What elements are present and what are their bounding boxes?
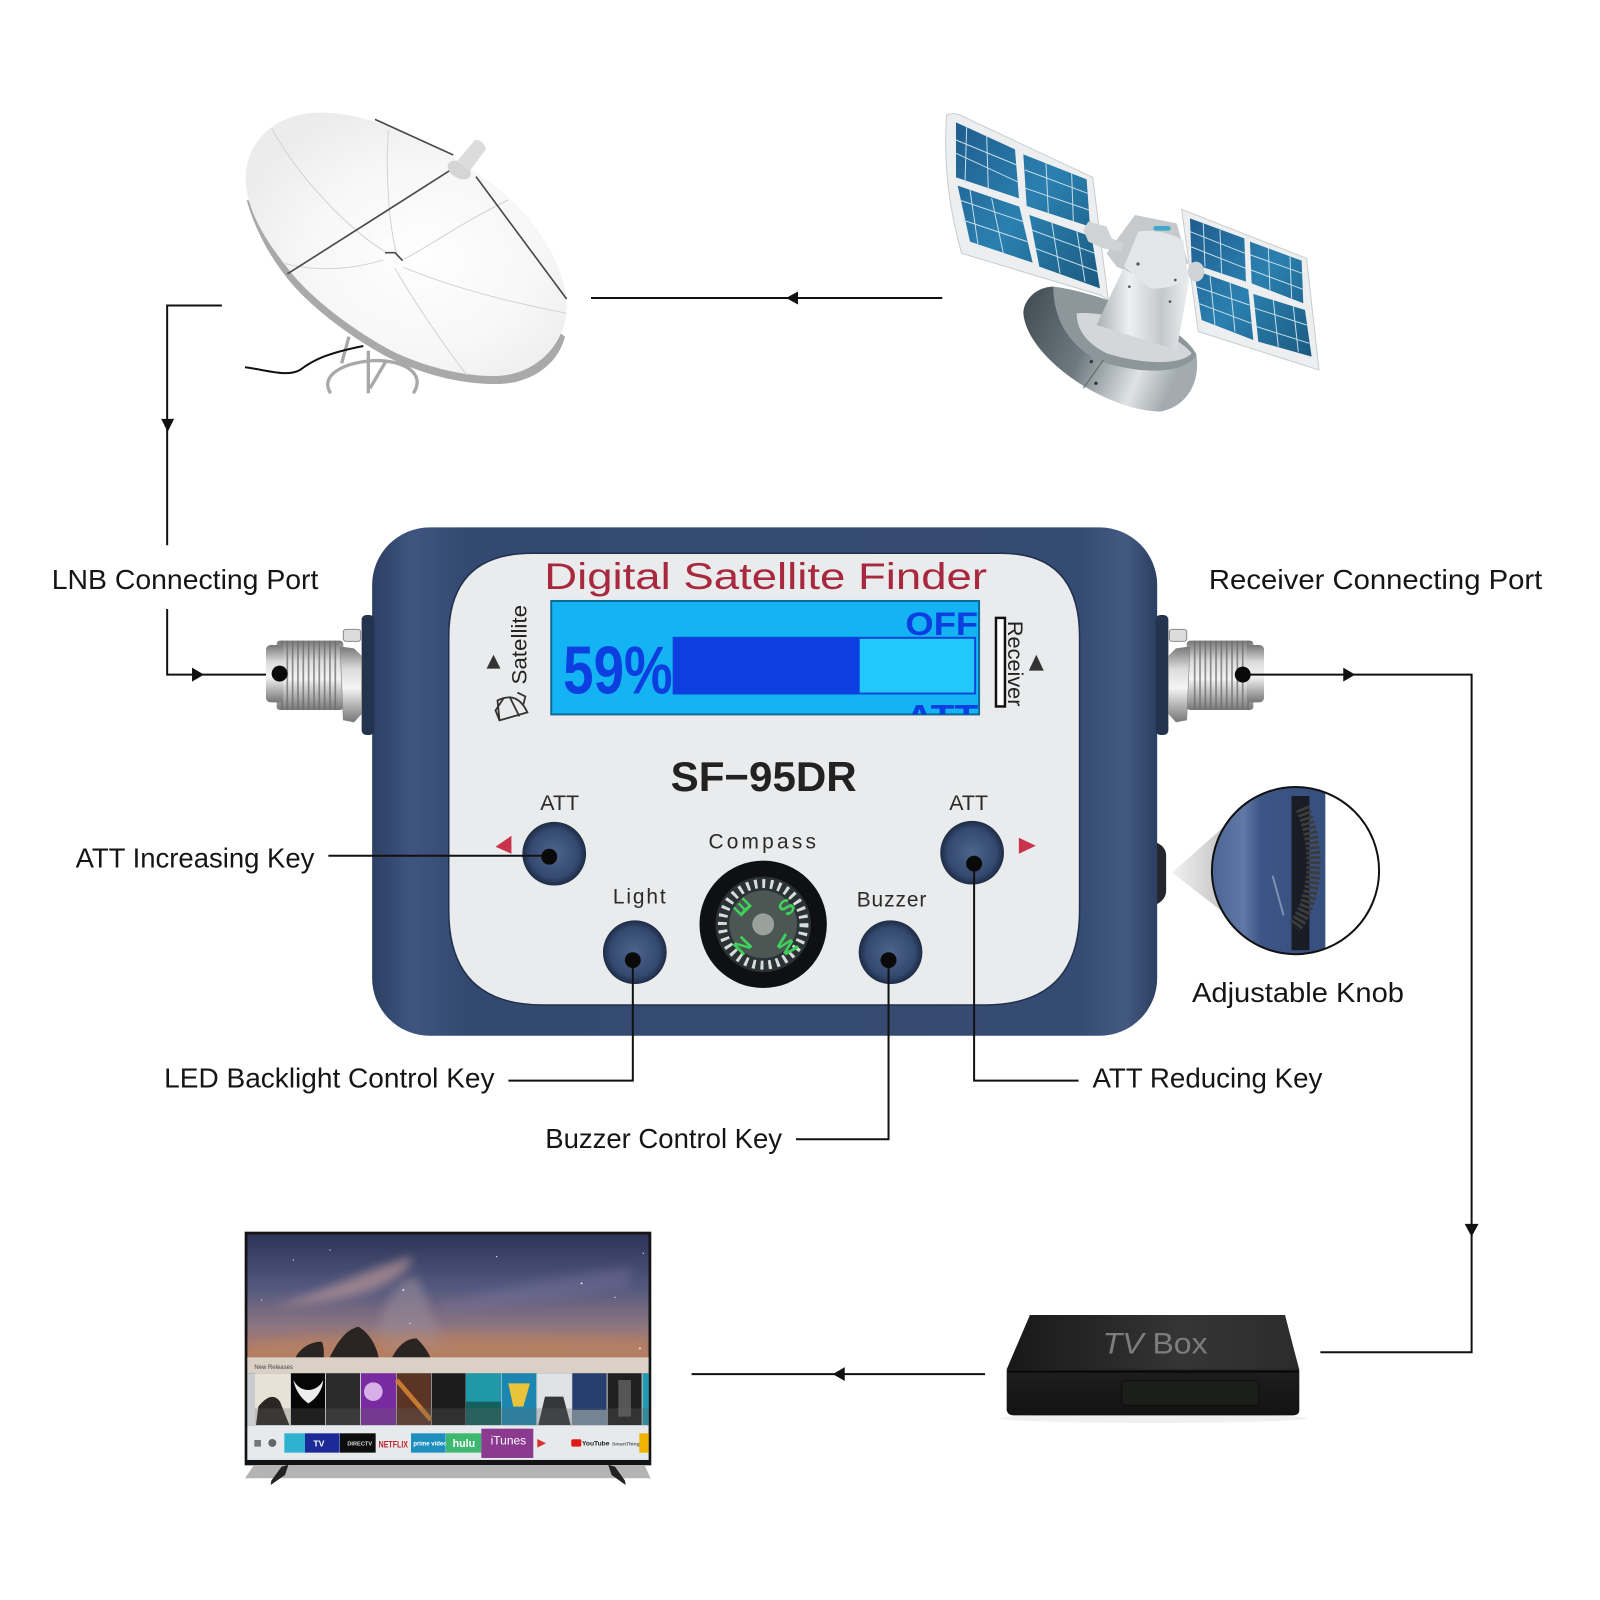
label: ATT Reducing Key: ATT Reducing Key — [1093, 1063, 1322, 1094]
app bar: YouTube — [582, 1440, 610, 1447]
app bar: NETFLIX — [379, 1439, 409, 1449]
poster row — [247, 1373, 649, 1425]
satellite port label — [487, 605, 531, 720]
key labels: Compass — [708, 831, 816, 854]
app bar: DIRECTV — [347, 1441, 372, 1447]
key labels: ATT — [540, 792, 579, 815]
arrow: receiver port to TV box — [1235, 667, 1479, 1352]
app bar: prime video — [413, 1441, 447, 1447]
leader: LED backlight key — [508, 952, 641, 1081]
label: Buzzer Control Key: Buzzer Control Key — [545, 1123, 782, 1154]
key labels: ATT — [949, 792, 988, 815]
leader: buzzer key — [796, 952, 896, 1139]
icon: receiver connector — [1156, 615, 1264, 735]
ATT increase key — [522, 822, 586, 886]
app bar: iTunes — [491, 1434, 526, 1448]
icon: satellite dish — [245, 113, 567, 393]
LCD display: 59% — [563, 634, 673, 709]
model name: SF−95DR — [671, 753, 857, 800]
TV shadow and stand — [245, 1466, 651, 1478]
arrow: satellite to dish — [591, 292, 942, 304]
icon: LNB connector — [266, 615, 374, 735]
arrow: TV box to television — [692, 1367, 985, 1381]
adjustable knob edge — [1154, 842, 1166, 905]
icon: television — [245, 1232, 651, 1485]
mountains — [295, 1327, 431, 1358]
key labels: Light — [613, 885, 666, 908]
compass — [699, 861, 827, 988]
device face — [449, 553, 1080, 1005]
LCD display: OFF — [905, 605, 978, 642]
app bar: SmartThings — [612, 1441, 643, 1447]
compass: N — [728, 931, 757, 960]
LCD display — [550, 600, 980, 716]
new releases band — [247, 1357, 649, 1373]
panel: satellite finder device — [372, 527, 1166, 1036]
leader: ATT increasing key — [328, 849, 557, 865]
left solar panel — [946, 114, 1108, 300]
icon: TV box: TV Box — [1103, 1327, 1208, 1360]
compass: E — [729, 893, 757, 921]
label: ATT Increasing Key: ATT Increasing Key — [76, 843, 314, 874]
receiver port label: Receiver — [1003, 621, 1026, 706]
device body — [372, 527, 1157, 1036]
icon: satellite — [946, 114, 1319, 412]
device title: Digital Satellite Finder — [544, 556, 987, 597]
LCD display: ATT — [905, 697, 978, 734]
icon: television: New Releases — [254, 1365, 293, 1371]
compass: W — [771, 929, 803, 962]
receiver port label — [996, 618, 1044, 706]
key labels: Buzzer — [857, 888, 926, 911]
icon: TV box — [1000, 1315, 1307, 1423]
satellite base — [1023, 287, 1197, 412]
buzzer key — [859, 920, 922, 984]
arrow: dish to LNB port — [161, 305, 280, 682]
label: LED Backlight Control Key: LED Backlight Control Key — [164, 1063, 495, 1094]
satellite body — [1083, 215, 1204, 350]
key labels — [540, 792, 988, 911]
app bar: hulu — [453, 1438, 475, 1450]
device and top signal path — [161, 292, 1166, 1036]
label: Adjustable Knob: Adjustable Knob — [1192, 977, 1404, 1008]
labels, leaders and lower signal path — [52, 564, 1543, 1381]
leader: ATT reducing key — [966, 856, 1079, 1081]
label: Receiver Connecting Port: Receiver Connecting Port — [1209, 564, 1543, 595]
dot: LNB port — [272, 666, 288, 682]
ATT reduce key — [940, 821, 1004, 885]
light key — [603, 920, 667, 984]
icon: adjustable knob magnifier — [1172, 786, 1383, 960]
red arrows — [496, 836, 1036, 854]
TV frame — [245, 1232, 651, 1465]
label: LNB Connecting Port: LNB Connecting Port — [52, 564, 319, 595]
right solar panel — [1182, 209, 1319, 370]
app bar — [247, 1425, 649, 1460]
app bar: TV — [313, 1439, 325, 1449]
compass: S — [773, 893, 801, 921]
satellite port label: Satellite — [508, 605, 531, 685]
